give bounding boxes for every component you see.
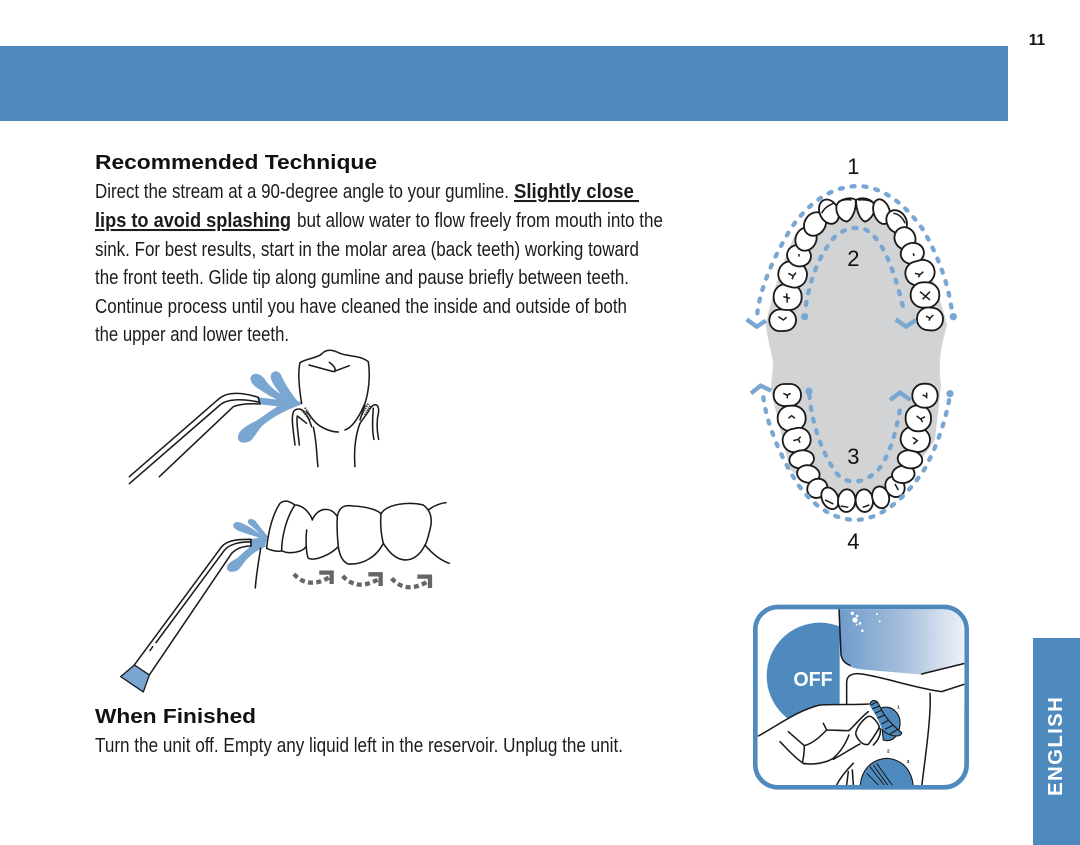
text block: technique instructions: Direct the stream at a 90-degree angle to your gumline. (95, 180, 509, 203)
outer path lower (763, 395, 950, 520)
header band (0, 46, 1008, 121)
heading: recommended technique: Recommended Technique (95, 152, 377, 174)
lower dial (860, 758, 914, 785)
tooth (299, 350, 369, 432)
language label: ENGLISH (1044, 697, 1067, 796)
jaw background (766, 205, 947, 510)
number 3: 3 (847, 444, 859, 469)
text block: technique instructions: Continue process until you have cleaned the inside and outside of both (95, 295, 627, 318)
dial numbers: 3 (907, 759, 910, 765)
base unit (847, 674, 965, 787)
off label: OFF (793, 669, 833, 691)
number 2: 2 (847, 246, 859, 271)
language tab (1033, 638, 1080, 845)
motion arrows (294, 573, 430, 588)
text block: technique instructions: Slightly close (514, 180, 639, 203)
dial numbers: 2 (887, 749, 890, 755)
inner path lower (809, 395, 901, 482)
hand (757, 704, 882, 785)
off circle (766, 622, 840, 718)
outer path upper (757, 186, 952, 313)
text block: technique instructions: the front teeth. Glide tip along gumline and pause briefly between teeth. (95, 266, 629, 289)
upper teeth diagram (747, 154, 957, 332)
off panel (755, 607, 970, 790)
page number: 11 (1029, 32, 1046, 49)
dial numbers (887, 705, 910, 765)
spray (239, 372, 301, 442)
illustration: tip at 90 degrees to gumline, side section (129, 350, 379, 484)
nozzle (134, 539, 251, 675)
text block: technique instructions: lips to avoid splashing (95, 209, 291, 232)
text block: technique instructions: but allow water to flow freely from mouth into the (297, 209, 663, 232)
spray (228, 520, 267, 571)
upper teeth (769, 196, 944, 332)
text block: when finished instructions: Turn the unit off. Empty any liquid left in the reservoir. Unplug the unit. (95, 734, 623, 757)
bubbles (851, 612, 881, 632)
chevrons lower (751, 386, 911, 400)
dial numbers: 1 (897, 705, 900, 711)
number 4: 4 (847, 529, 859, 554)
reservoir (839, 607, 965, 675)
teeth (255, 548, 261, 588)
lower teeth (774, 384, 938, 513)
inner path upper (806, 228, 904, 312)
tooth fissures (778, 200, 933, 321)
text block: technique instructions: the upper and lower teeth. (95, 323, 289, 346)
text block: technique instructions: sink. For best results, start in the molar area (back teeth) working toward (95, 238, 639, 261)
number 1: 1 (847, 154, 859, 179)
chevrons upper (747, 319, 916, 327)
knob (880, 707, 900, 741)
heading: when finished: When Finished (95, 706, 256, 728)
text block: technique instructions (95, 180, 663, 346)
tooth fissures (783, 393, 927, 507)
white separation around unit (840, 607, 970, 707)
illustration: tip along side of teeth with motion arrows (121, 501, 449, 692)
lower teeth diagram (751, 384, 954, 554)
